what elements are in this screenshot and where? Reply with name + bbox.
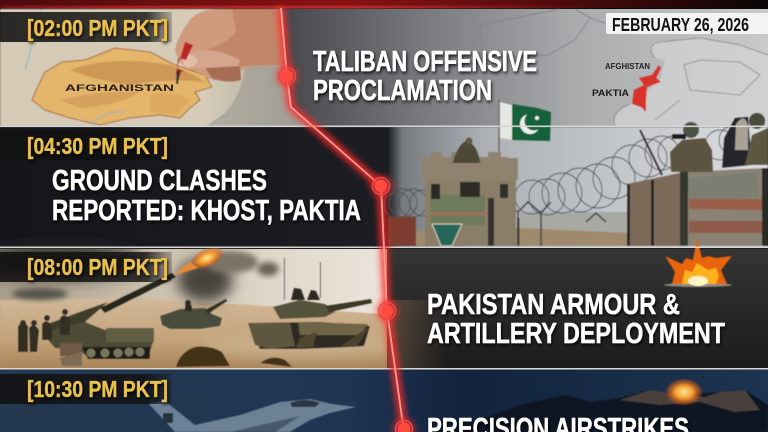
concrete barrier wall — [627, 130, 768, 246]
panel: 08:00 PM armour and artillery — [0, 238, 768, 369]
node 1 — [276, 65, 298, 87]
timestamp: 02:00 PM PKT: [02:00 PM PKT] — [27, 15, 168, 41]
mountains with fire — [450, 379, 768, 432]
artillery description panel — [387, 249, 768, 369]
gray regional map — [480, 9, 768, 126]
fighter jet — [148, 399, 356, 432]
timestamp: 04:30 PM PKT — [0, 130, 172, 160]
main battle tank — [248, 258, 372, 349]
timestamp: 02:00 PM PKT — [0, 12, 172, 42]
map of Afghanistan with hand placing pin — [0, 9, 312, 126]
timestamp: 08:00 PM PKT: [08:00 PM PKT] — [27, 254, 168, 280]
distant tank — [160, 299, 227, 329]
desert battlefield scene — [0, 243, 400, 369]
border post scene — [384, 113, 768, 247]
guard tower — [421, 138, 518, 246]
chain-link fence — [504, 202, 606, 246]
hand — [175, 9, 285, 82]
node 3 — [376, 300, 398, 322]
icon: explosion — [664, 238, 732, 287]
heading: ground clashes reported: GROUND CLASHES — [52, 165, 267, 197]
soldier with binoculars — [670, 122, 713, 172]
panel: 04:30 PM ground clashes — [0, 99, 768, 247]
flag of Pakistan — [498, 99, 551, 152]
panel: 10:30 PM precision airstrikes — [0, 370, 768, 432]
map label Paktia: PAKTIA — [592, 88, 629, 99]
top banner — [0, 0, 768, 10]
heading: ground clashes reported: REPORTED: KHOST, PAKTIA — [52, 195, 361, 227]
heading: Taliban offensive proclamation: PROCLAMATION — [313, 75, 492, 107]
row dividers — [0, 126, 768, 370]
howitzer — [42, 273, 176, 359]
node 4 — [393, 418, 415, 432]
heading: Taliban offensive proclamation: TALIBAN OFFENSIVE — [313, 46, 537, 78]
timestamp: 08:00 PM PKT — [0, 252, 172, 282]
razor wire coils — [384, 126, 747, 218]
heading: Taliban offensive proclamation — [313, 46, 537, 107]
timestamp: 04:30 PM PKT: [04:30 PM PKT] — [27, 133, 168, 159]
timestamp: 10:30 PM PKT — [0, 374, 172, 404]
highlighted Paktia region — [632, 65, 661, 112]
soldiers at right — [722, 113, 768, 168]
muzzle flash — [188, 243, 226, 273]
map label Afghanistan on pinned map: AFGHANISTAN — [65, 83, 174, 94]
small hut — [388, 217, 416, 246]
timeline: glowing red line with nodes — [0, 8, 600, 432]
red pin — [176, 42, 193, 84]
scrub bushes — [60, 347, 292, 367]
panel: 02:00 PM Taliban offensive proclamation — [0, 9, 768, 126]
gun crew — [18, 309, 70, 352]
fence posts — [517, 218, 520, 246]
map label Afghanistan: AFGHISTAN — [605, 62, 650, 71]
heading: Pakistan armour and artillery deployment — [427, 289, 725, 350]
node 2 — [370, 175, 392, 197]
heading: Pakistan armour and artillery deployment: PAKISTAN ARMOUR & — [427, 289, 680, 321]
heading: ground clashes reported — [52, 165, 361, 227]
timestamp: 10:30 PM PKT: [10:30 PM PKT] — [27, 376, 168, 402]
